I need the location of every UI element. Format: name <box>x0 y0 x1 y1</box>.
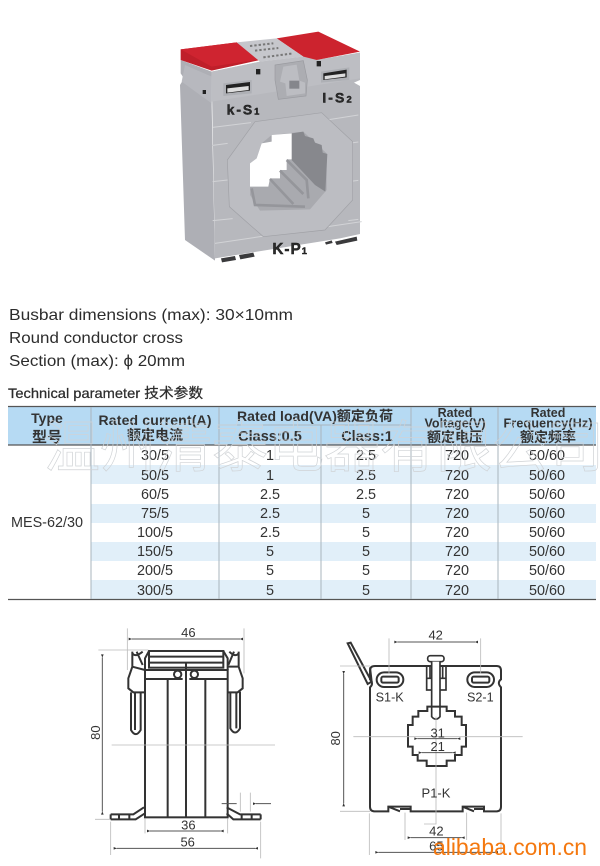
dimension 36: 36 <box>181 818 196 833</box>
label I-S2: I-S2 <box>322 89 352 105</box>
table header labels: Rated current(A) <box>98 412 212 428</box>
front top shading <box>212 53 360 102</box>
base slots <box>221 237 357 262</box>
side highlight <box>182 65 212 103</box>
terminal slot left <box>223 80 252 96</box>
type label: MES-62/30 <box>11 515 83 531</box>
table: technical parameters <box>8 406 596 600</box>
row 200/5 <box>137 563 565 579</box>
dimension 46 <box>132 625 240 640</box>
row 75/5: 720 <box>445 506 469 522</box>
dimension 42 top: 42 <box>428 627 443 642</box>
row 100/5 <box>137 525 565 541</box>
octagon recess <box>227 113 353 237</box>
row 60/5: 2.5 <box>260 487 280 503</box>
table header labels: Voltage(V) <box>424 416 486 430</box>
product photo: current transformer <box>180 32 362 262</box>
row 60/5: 2.5 <box>356 487 376 503</box>
stepped opening <box>250 132 327 211</box>
row 300/5: 300/5 <box>137 583 173 599</box>
dimension 56: 56 <box>180 835 195 850</box>
terminal labels: S1-K <box>376 690 404 704</box>
row 100/5: 720 <box>445 525 469 541</box>
table header labels: Type <box>31 410 63 426</box>
dimension 21: 21 <box>430 739 445 754</box>
drawing: side view <box>88 625 275 858</box>
small gap arrows <box>222 802 271 805</box>
row 50/5 <box>141 468 565 484</box>
row 200/5: 200/5 <box>137 563 173 579</box>
table header labels: Frequency(Hz) <box>504 416 592 430</box>
table header labels: 型号 <box>32 429 62 446</box>
dimension 36 <box>150 818 221 833</box>
row 200/5: 5 <box>362 563 370 579</box>
row 200/5: 5 <box>266 563 274 579</box>
dimension 21 <box>422 739 453 754</box>
lever <box>348 643 372 684</box>
drawing: front view <box>328 627 523 855</box>
stepped aperture <box>408 707 466 766</box>
slot S2 <box>467 672 494 687</box>
row 200/5: 720 <box>445 563 469 579</box>
table header labels: 额定电流 <box>127 427 183 443</box>
text block: busbar specifications: Round conductor cross <box>9 330 183 347</box>
table header labels: 额定频率 <box>520 429 576 445</box>
inner floor ridges <box>252 160 308 207</box>
row 300/5: 720 <box>445 583 469 599</box>
text block: busbar specifications: Busbar dimensions (max): 30×10mm <box>9 307 293 324</box>
screw assembly <box>427 656 446 719</box>
terminal clip <box>275 61 307 99</box>
row 50/5: 720 <box>445 468 469 484</box>
body outline <box>145 651 228 817</box>
row 30/5: 720 <box>445 448 469 464</box>
row 30/5: 1 <box>266 448 274 464</box>
dimension 42 top <box>397 627 475 642</box>
centre label plate <box>237 38 303 62</box>
front ridges <box>213 115 362 243</box>
side face <box>180 60 215 261</box>
row 30/5: 2.5 <box>356 448 376 464</box>
mounting feet <box>111 807 261 819</box>
row 75/5: 75/5 <box>141 506 169 522</box>
dimension 42 bottom: 42 <box>429 824 444 839</box>
see-through white window <box>250 133 292 187</box>
row 300/5 <box>137 583 565 599</box>
row 100/5: 5 <box>362 525 370 541</box>
row 60/5: 720 <box>445 487 469 503</box>
row 30/5: 50/60 <box>529 448 565 464</box>
centre and extension lines <box>95 628 275 858</box>
row 100/5: 50/60 <box>529 525 565 541</box>
row 50/5: 2.5 <box>356 468 376 484</box>
table header labels: Rated <box>438 406 472 420</box>
text block: busbar specifications <box>9 307 293 370</box>
centre and extension lines <box>340 638 523 855</box>
dimension 65: 65 <box>429 839 444 854</box>
table header labels: Class:1 <box>341 429 393 445</box>
dimension 80 <box>328 674 344 803</box>
terminal slot right <box>321 67 349 83</box>
row 30/5: 30/5 <box>141 448 169 464</box>
slot S1 <box>377 672 403 687</box>
row 150/5: 150/5 <box>137 544 173 560</box>
dimension 80: 80 <box>328 731 343 746</box>
label K-P1: K-P1 <box>272 241 307 258</box>
watermark: 温州清泰电器有限公司 <box>44 416 600 479</box>
right terminal <box>228 652 243 732</box>
row 50/5: 50/60 <box>529 468 565 484</box>
inner right wall <box>292 132 327 192</box>
row 150/5 <box>137 544 565 560</box>
table header labels: 额定电压 <box>427 429 483 445</box>
table header labels: Rated load(VA)额定负荷 <box>237 408 393 424</box>
row 30/5 <box>141 448 565 464</box>
terminal label S2: S2-1 <box>467 690 494 704</box>
small square marks <box>203 61 321 94</box>
front face <box>212 53 360 258</box>
alternating rows <box>91 465 596 599</box>
table header labels <box>31 406 592 446</box>
dimension 46: 46 <box>181 625 196 640</box>
body outline <box>370 666 501 811</box>
label k-S1: k-S1 <box>227 102 259 118</box>
dimension 80: 80 <box>88 725 103 740</box>
left terminal <box>128 652 145 734</box>
dimension 31: 31 <box>430 725 445 740</box>
row 150/5: 720 <box>445 544 469 560</box>
row 150/5: 50/60 <box>529 544 565 560</box>
row 200/5: 50/60 <box>529 563 565 579</box>
row 50/5: 50/5 <box>141 468 169 484</box>
table header background <box>8 407 596 445</box>
table header labels: Class:0.5 <box>238 429 302 445</box>
red cap left <box>181 42 260 71</box>
red cap right <box>277 32 360 60</box>
dimension 31 <box>417 725 457 740</box>
row 100/5: 2.5 <box>260 525 280 541</box>
dimension 42 bottom <box>411 824 462 839</box>
row 100/5: 100/5 <box>137 525 173 541</box>
row 300/5: 50/60 <box>529 583 565 599</box>
text block: busbar specifications: Section (max): ϕ 20mm <box>9 353 185 370</box>
row 60/5: 50/60 <box>529 487 565 503</box>
row 60/5 <box>141 487 565 503</box>
row 300/5: 5 <box>362 583 370 599</box>
foot slots <box>388 807 484 811</box>
dimension 65 <box>378 839 495 854</box>
row 75/5: 5 <box>362 506 370 522</box>
part label P1-K: P1-K <box>422 785 451 800</box>
row 75/5: 2.5 <box>260 506 280 522</box>
row 50/5: 1 <box>266 468 274 484</box>
heading: technical parameter: Technical parameter 技术参数 <box>8 385 203 401</box>
row 300/5: 5 <box>266 583 274 599</box>
row 60/5: 60/5 <box>141 487 169 503</box>
dimension 56 <box>117 835 255 850</box>
watermark: alibaba.com.cn: alibaba.com.cn <box>433 834 587 860</box>
row 150/5: 5 <box>266 544 274 560</box>
row 75/5: 50/60 <box>529 506 565 522</box>
row 150/5: 5 <box>362 544 370 560</box>
table header labels: Rated <box>531 406 565 420</box>
red cap left top <box>181 42 260 67</box>
row 75/5 <box>141 506 565 522</box>
